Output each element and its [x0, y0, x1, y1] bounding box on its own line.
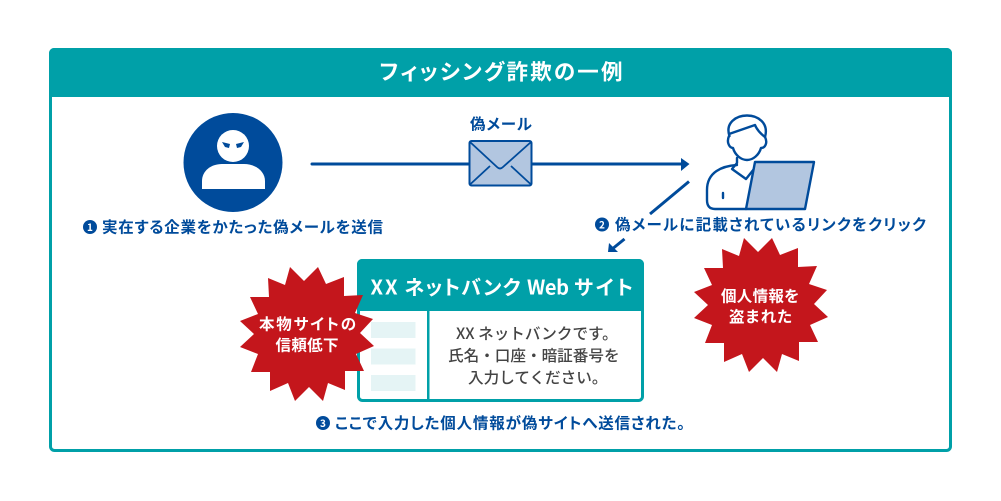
step 1 number: 1	[87, 219, 93, 234]
panel: outer frame	[49, 48, 952, 450]
burst: data stolen	[694, 238, 828, 372]
arrow: click to site	[608, 182, 689, 252]
title bar	[49, 48, 952, 97]
step 3 number: 3	[320, 415, 326, 430]
burst: trust loss	[240, 267, 374, 401]
website heading: サイト	[574, 272, 633, 300]
website body text: 氏名・口座・暗証番号を	[448, 344, 620, 366]
website heading: Web	[527, 272, 569, 300]
icon: attacker	[184, 113, 282, 212]
step 1 number	[83, 219, 97, 234]
burst: trust loss: 本物サイトの	[259, 312, 356, 334]
website heading: ネットバンク	[404, 272, 520, 300]
website heading	[370, 272, 633, 300]
burst: data stolen: 盗まれた	[729, 305, 792, 327]
step 2 text: 偽メールに記載されているリンクをクリック	[615, 213, 926, 235]
title: フィッシング詐欺の一例	[380, 56, 622, 86]
burst: trust loss: 信頼低下	[276, 334, 338, 356]
arrow: fake mail line	[312, 158, 690, 171]
panel: bank website	[357, 259, 644, 400]
step 3 number	[316, 415, 330, 430]
website body text: 入力してください。	[468, 366, 607, 388]
burst: data stolen: 個人情報を	[721, 284, 799, 306]
icon: person with laptop	[707, 116, 814, 209]
website heading: XX	[370, 272, 398, 300]
website body text: XX ネットバンクです。	[456, 322, 618, 344]
step 2 number: 2	[599, 216, 605, 232]
website body text	[448, 322, 620, 388]
icon: envelope	[470, 141, 532, 186]
label: fake mail: 偽メール	[470, 112, 533, 134]
step 1 text: 実在する企業をかたった偽メールを送信	[102, 216, 383, 238]
step 3 text: ここで入力した個人情報が偽サイトへ送信された。	[335, 412, 685, 434]
step 2 number	[595, 216, 609, 232]
